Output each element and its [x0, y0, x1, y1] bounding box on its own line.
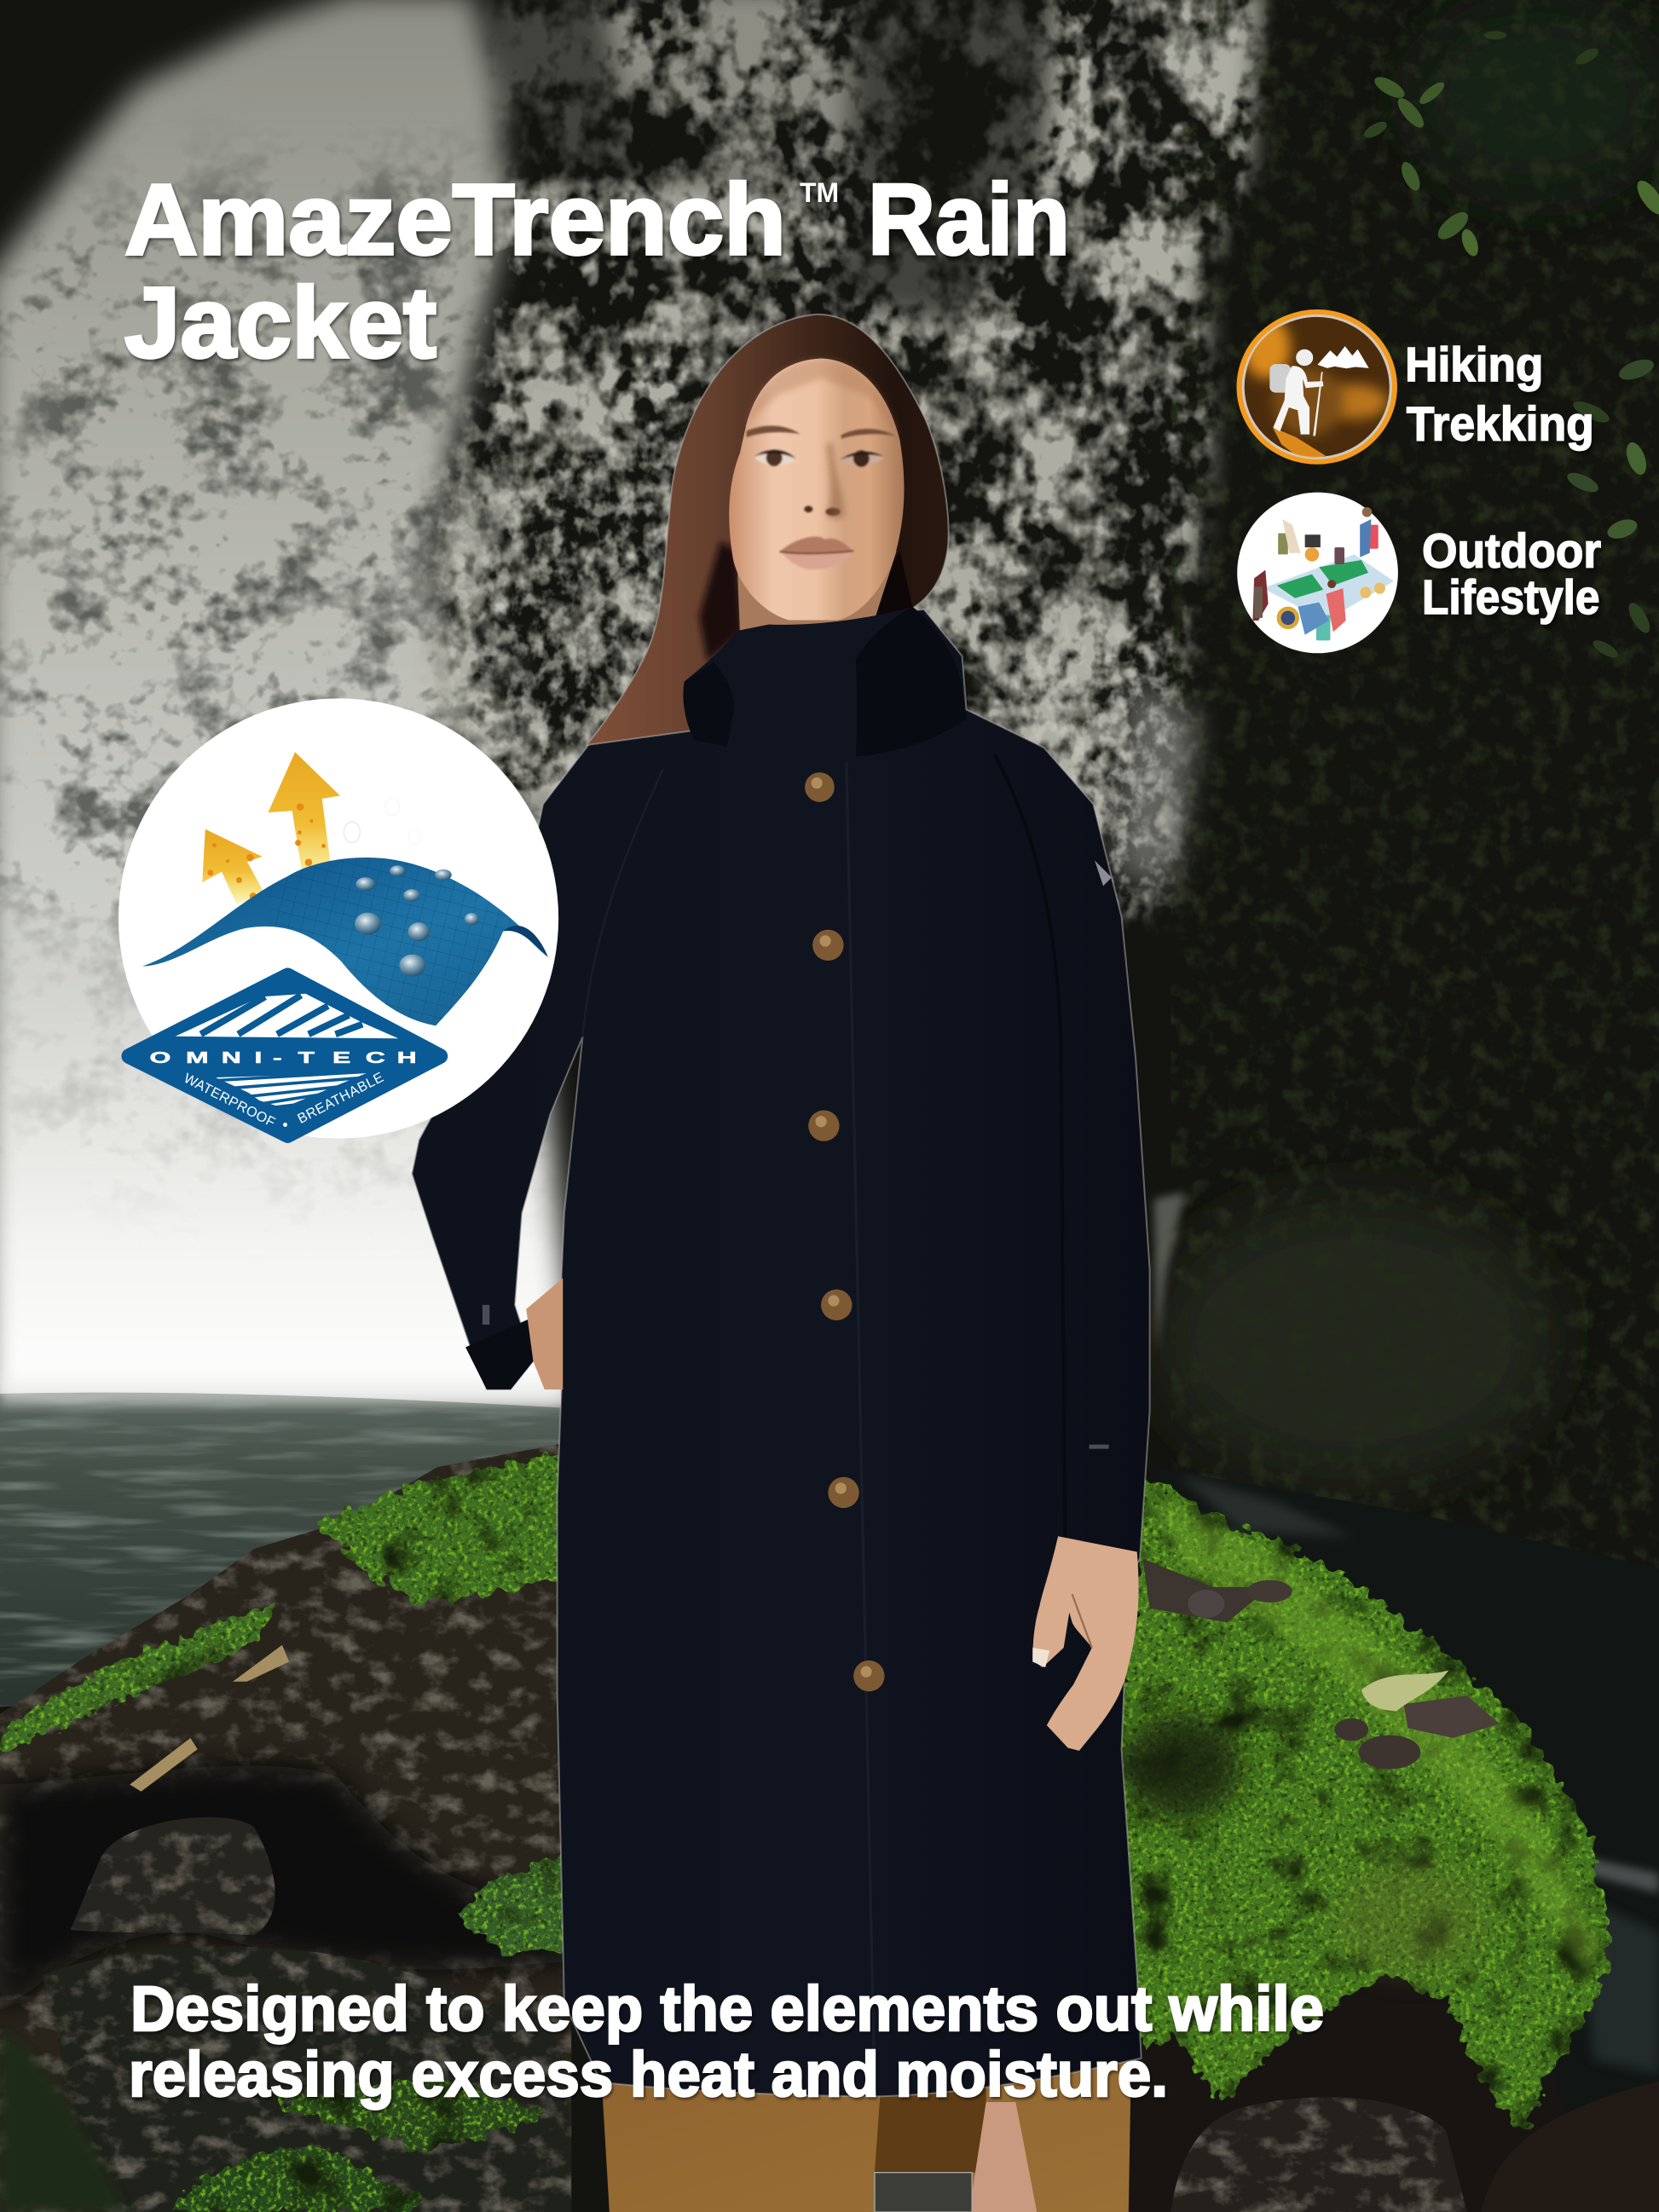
label: outdoor lifestyle: Lifestyle [1422, 570, 1599, 624]
forest cliff, right side [1157, 0, 1659, 1580]
icon: hiking [1237, 309, 1397, 465]
title: Rain [868, 164, 1070, 276]
white disc [118, 698, 558, 1139]
tagline: Designed to keep the elements out while [130, 1973, 1324, 2044]
title [124, 164, 1070, 379]
omni-tech callout [118, 698, 558, 1139]
right hand [1032, 1536, 1139, 1751]
khaki trousers [599, 2046, 1131, 2212]
stones on boulder [1142, 1559, 1500, 1769]
label: outdoor lifestyle: Outdoor [1422, 523, 1601, 577]
leaf on moss [1361, 1670, 1448, 1711]
rocks, lower left [0, 1441, 571, 2212]
river water, left [0, 1377, 571, 1707]
fabric membrane with water beads [142, 852, 554, 1035]
water vapour droplets [344, 797, 421, 845]
label: outdoor lifestyle [1422, 523, 1601, 624]
neck [737, 551, 897, 632]
waterfall spray [0, 0, 1263, 1411]
rock bottom right [1481, 2081, 1659, 2212]
nose shadow [826, 443, 844, 519]
tagline: releasing excess heat and moisture. [129, 2039, 1168, 2110]
model in coat [412, 315, 1150, 2212]
facial features [747, 425, 896, 569]
mossy boulder, right [1114, 1473, 1608, 2212]
label: hiking trekking [1405, 338, 1594, 450]
icon: outdoor lifestyle [1237, 493, 1398, 653]
title: Jacket [124, 267, 436, 379]
hair [587, 315, 949, 745]
label: hiking trekking: Trekking [1407, 396, 1594, 450]
tagline [129, 1973, 1324, 2110]
icon: moisture arrows [202, 752, 340, 904]
activity badges and labels [1237, 309, 1601, 653]
foliage, upper right [1361, 31, 1659, 661]
title: TM [800, 177, 839, 208]
omni-tech logo badge [129, 975, 440, 1135]
moss patches, left rocks [0, 1453, 567, 2212]
omni-tech logo badge: BREATHABLE [295, 1070, 386, 1127]
left hand in pocket [526, 1278, 563, 1389]
label: hiking trekking: Hiking [1405, 338, 1543, 391]
omni-tech logo badge: OMNI-TECH [150, 1048, 417, 1066]
omni-tech logo badge: WATERPROOF [182, 1071, 278, 1130]
coat buttons [805, 772, 885, 1691]
head, hair and collar [587, 315, 967, 759]
river water, right [1150, 1467, 1659, 2116]
face [729, 358, 905, 620]
high collar [683, 607, 967, 759]
coat body and sleeves [412, 609, 1150, 2096]
title: AmazeTrench [124, 164, 786, 276]
falling stream beside rock face [1154, 1192, 1185, 1354]
